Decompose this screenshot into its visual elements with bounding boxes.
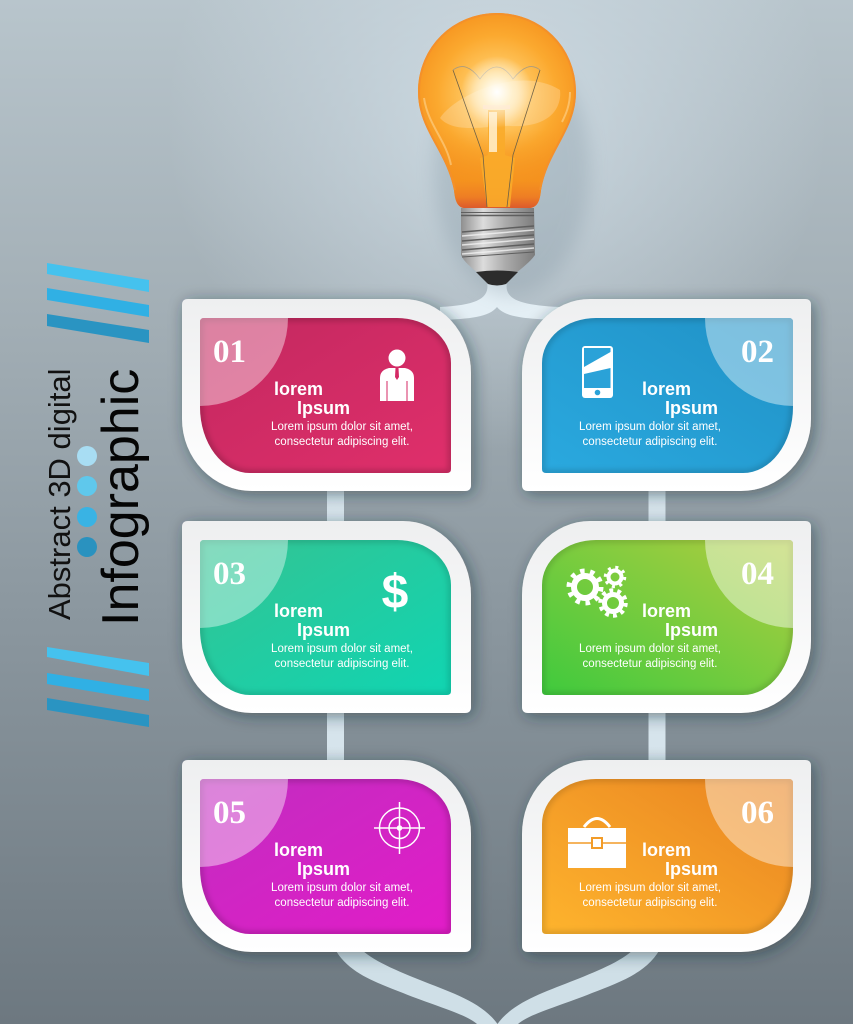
- number: 01: [213, 334, 246, 370]
- body text: Lorem ipsum dolor sit amet,: [271, 643, 413, 655]
- heading: lorem: [274, 840, 323, 860]
- icon: business person: [380, 350, 414, 401]
- light bulb: [418, 13, 590, 295]
- body text: consectetur adipiscing elit.: [275, 897, 409, 909]
- heading: Ipsum: [297, 398, 350, 418]
- bulb filament: [453, 67, 540, 207]
- icon: briefcase: [568, 818, 626, 868]
- panel inner shadow and gloss: [200, 779, 451, 934]
- card frame: [522, 521, 811, 713]
- card frame: [182, 299, 471, 491]
- icon: target crosshair: [374, 802, 425, 854]
- card colour panel: [200, 540, 451, 695]
- heading: Ipsum: [665, 859, 718, 879]
- card frame: [182, 760, 471, 952]
- bulb soft shadow: [434, 45, 590, 295]
- bulb lower tint: [442, 158, 547, 208]
- panel inner shadow and gloss: [200, 540, 451, 695]
- body text: consectetur adipiscing elit.: [275, 436, 409, 448]
- heading: Ipsum: [665, 398, 718, 418]
- card 01: [175, 292, 484, 505]
- heading: Ipsum: [297, 859, 350, 879]
- card 04: [516, 513, 824, 727]
- bulb rim: [419, 14, 575, 190]
- body text: consectetur adipiscing elit.: [583, 436, 717, 448]
- number: 03: [213, 556, 246, 592]
- heading: lorem: [642, 840, 691, 860]
- card 05: [176, 752, 482, 966]
- body text: consectetur adipiscing elit.: [583, 897, 717, 909]
- connector lines linking bulb and cards: [327, 282, 666, 1024]
- side stripes: bottom group: [47, 647, 149, 727]
- card frame: [522, 299, 811, 491]
- icon: smartphone: [582, 346, 613, 398]
- bulb reflection: [440, 81, 560, 128]
- card 03: [176, 513, 484, 727]
- bulb stem: [480, 107, 515, 207]
- panel inner shadow and gloss: [542, 540, 793, 695]
- heading: lorem: [274, 601, 323, 621]
- four decorative dots: [77, 446, 97, 557]
- bulb glass: [418, 13, 576, 208]
- card frame: [182, 521, 471, 713]
- panel inner shadow and gloss: [542, 779, 793, 934]
- body text: consectetur adipiscing elit.: [275, 658, 409, 670]
- icon: dollar sign: $: [382, 566, 409, 619]
- heading: Ipsum: [297, 620, 350, 640]
- panel inner shadow and gloss: [200, 318, 451, 473]
- panel inner shadow and gloss: [542, 318, 793, 473]
- body text: Lorem ipsum dolor sit amet,: [579, 882, 721, 894]
- side stripes: top group: [47, 263, 149, 343]
- number: 06: [741, 795, 774, 831]
- card frame: [522, 760, 811, 952]
- bulb glow: [461, 56, 533, 128]
- heading: Ipsum: [665, 620, 718, 640]
- side heading: Infographic: Infographic: [92, 369, 150, 626]
- card colour panel: [542, 779, 793, 934]
- body text: Lorem ipsum dolor sit amet,: [271, 421, 413, 433]
- card colour panel: [200, 779, 451, 934]
- body text: Lorem ipsum dolor sit amet,: [271, 882, 413, 894]
- heading: lorem: [642, 379, 691, 399]
- card colour panel: [542, 318, 793, 473]
- body text: Lorem ipsum dolor sit amet,: [579, 643, 721, 655]
- card colour panel: [200, 318, 451, 473]
- card 02: [515, 292, 824, 505]
- body text: consectetur adipiscing elit.: [583, 658, 717, 670]
- number: 04: [741, 556, 774, 592]
- card 06: [516, 752, 823, 966]
- side heading: Abstract 3D digital: Abstract 3D digital: [42, 368, 77, 620]
- background light behind the bulb: [0, 0, 853, 520]
- card colour panel: [542, 540, 793, 695]
- bulb rim highlight: [424, 92, 570, 165]
- heading: lorem: [274, 379, 323, 399]
- icon: gears: [569, 568, 626, 616]
- number: 05: [213, 795, 246, 831]
- number: 02: [741, 334, 774, 370]
- body text: Lorem ipsum dolor sit amet,: [579, 421, 721, 433]
- heading: lorem: [642, 601, 691, 621]
- bulb screw base: [461, 208, 535, 286]
